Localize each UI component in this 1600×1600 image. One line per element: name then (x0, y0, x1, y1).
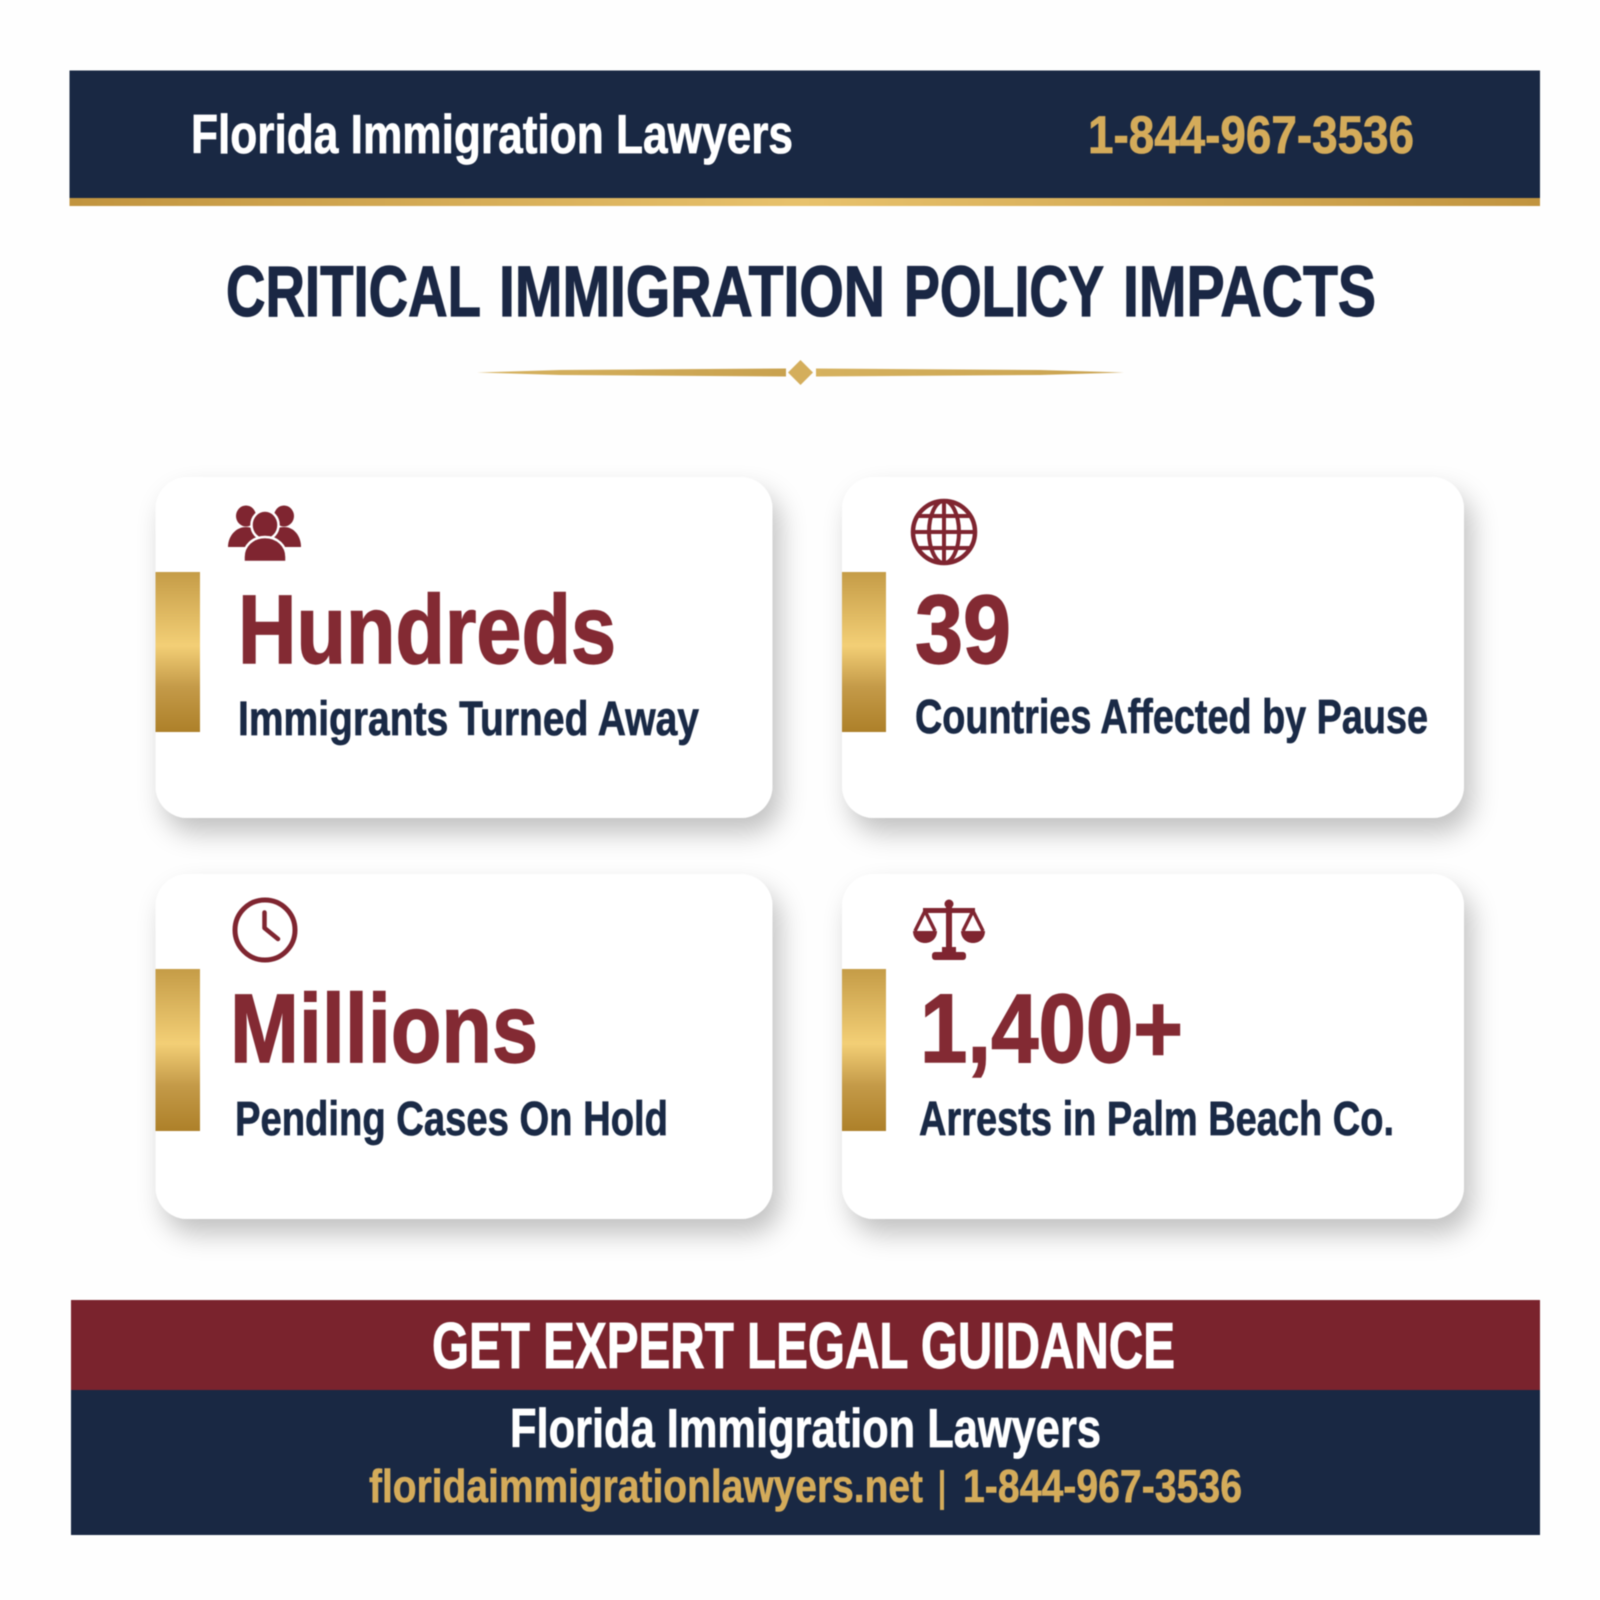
card background (156, 477, 772, 818)
footer website and phone (369, 1460, 1242, 1512)
header band (70, 70, 1540, 206)
call to action heading: GET EXPERT LEGAL GUIDANCE (432, 1309, 1175, 1382)
separator (940, 1470, 944, 1510)
stat value: Millions (230, 974, 538, 1083)
stat value: 1,400+ (920, 974, 1183, 1083)
title: IMMIGRATION (499, 253, 885, 332)
panel: countries affected (842, 477, 1464, 818)
gold accent bar (156, 969, 200, 1131)
header gold rule (70, 198, 1540, 206)
stat label: Immigrants Turned Away (238, 693, 699, 746)
footer navy band (71, 1390, 1540, 1535)
stat label: Countries Affected by Pause (915, 691, 1428, 744)
gold accent bar (842, 969, 886, 1131)
title: POLICY (904, 253, 1104, 332)
icon: scales of justice (913, 900, 985, 960)
card background (156, 874, 772, 1219)
panel: immigrants turned away (156, 477, 772, 818)
title divider with diamond (477, 360, 1124, 385)
panel: arrests (842, 874, 1464, 1219)
icon: globe (913, 501, 975, 563)
card background (842, 874, 1464, 1219)
title: IMPACTS (1123, 253, 1376, 332)
footer red band (71, 1300, 1540, 1390)
stat label: Arrests in Palm Beach Co. (919, 1093, 1394, 1146)
footer website: floridaimmigrationlawyers.net (369, 1460, 923, 1512)
footer phone: 1-844-967-3536 (963, 1460, 1242, 1512)
footer call to action (71, 1300, 1540, 1535)
title (226, 253, 1376, 332)
card background (842, 477, 1464, 818)
header navy background (70, 70, 1540, 198)
header phone number: 1-844-967-3536 (1088, 106, 1414, 165)
panel: pending cases (156, 874, 772, 1219)
header firm name: Florida Immigration Lawyers (191, 103, 793, 165)
stat label: Pending Cases On Hold (235, 1093, 668, 1146)
icon: clock (235, 900, 295, 960)
stat value: Hundreds (238, 575, 616, 684)
footer firm name: Florida Immigration Lawyers (510, 1397, 1101, 1459)
gold accent bar (842, 572, 886, 732)
icon: people group (228, 506, 301, 562)
gold accent bar (156, 572, 200, 732)
title: CRITICAL (226, 253, 481, 332)
stat value: 39 (915, 575, 1011, 684)
